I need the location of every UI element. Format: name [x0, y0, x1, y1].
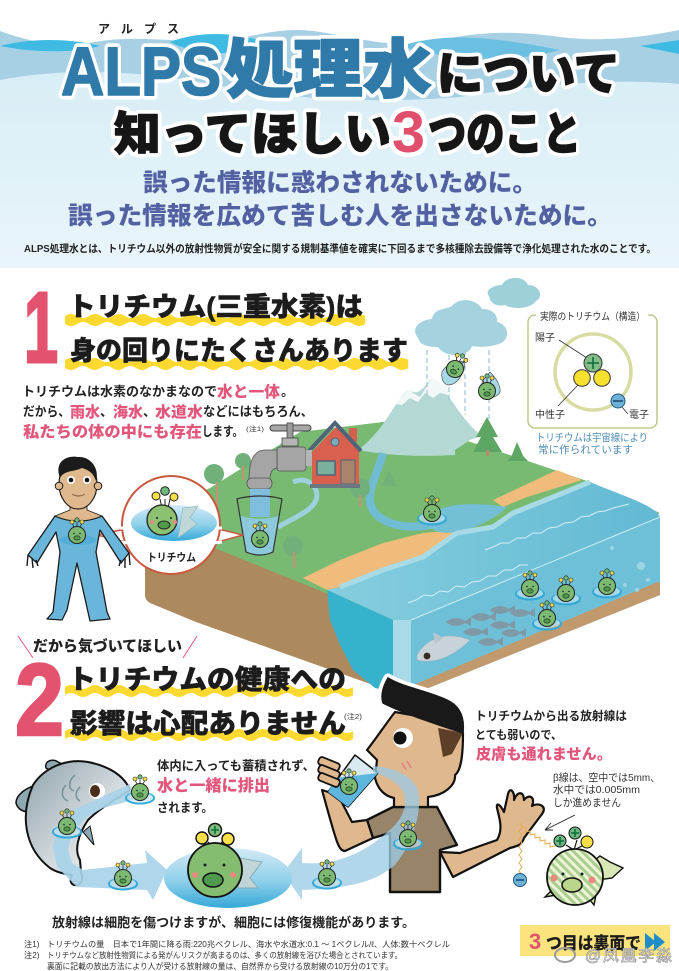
- section 1 body text: (注1): [246, 424, 264, 433]
- diorama: land and sea block: [145, 378, 660, 695]
- text: beta ray range: [553, 771, 660, 809]
- characters in the streams: [53, 775, 422, 890]
- cloud: large: [415, 300, 507, 355]
- electron: [611, 394, 625, 408]
- section 1 body text: [22, 382, 313, 441]
- section 1 body text: 、: [100, 404, 113, 419]
- section 1 body text: 、: [143, 404, 156, 419]
- section 1 body text: トリチウムは水素のなかまなので: [22, 384, 217, 399]
- title: つのこと: つのこと: [428, 108, 581, 160]
- title: について: について: [437, 48, 620, 100]
- title: ALPS: ALPS: [61, 33, 221, 110]
- callout: third point on the back: つ目は裏面で: [546, 933, 641, 953]
- title: 3: 3: [392, 100, 425, 165]
- text: not accumulated in the body: されます。: [157, 801, 213, 815]
- furigana アルプス: アルプス: [98, 22, 179, 36]
- panel title: [536, 310, 648, 320]
- sideburn: [438, 728, 463, 757]
- section 1 body text: 。: [281, 384, 294, 399]
- text: not accumulated in the body: 水と一緒に排出: [157, 776, 270, 795]
- house: [309, 423, 361, 488]
- footnotes: 裏面に記載の放出方法により人が受ける放射線の量は、自然界から受ける放射線の10万分の1です。: [47, 961, 393, 971]
- section 1 body text: などにはもちろん、: [203, 404, 313, 419]
- heading line 2: 身の回りにたくさんあります: [70, 336, 408, 366]
- footnotes: トリチウムなど放射性物質による発がんリスクが高まるのは、多くの放射線を浴びた場合とされています。: [47, 950, 402, 960]
- section 1 number: 1: [24, 272, 58, 384]
- text: radiation is very weak: とても弱いので、: [475, 728, 562, 742]
- glass corner: [393, 620, 411, 695]
- section 1 body text: 海水: [113, 403, 143, 421]
- text: beta ray range: β線は、空中では5mm、: [553, 771, 660, 784]
- text: radiation is very weak: 皮膚も通れません。: [476, 745, 612, 763]
- heading line 1: トリチウム(三重水素)は: [68, 292, 363, 322]
- title: ALPS: ALPS: [61, 33, 221, 110]
- mountains: [358, 378, 482, 456]
- title: つのこと: つのこと: [428, 108, 581, 160]
- small stream left: [278, 480, 317, 527]
- panel: actual tritium structure: 中性子: [535, 408, 565, 421]
- faucet: [247, 423, 312, 489]
- title: 処理水: 処理水: [224, 34, 432, 106]
- pond: [425, 504, 507, 533]
- section 1 body text: だから、: [23, 404, 70, 419]
- callout circle: tritium character: [120, 476, 222, 574]
- shoreline foam: [340, 482, 590, 587]
- section 1 body text: 水と一体: [217, 382, 280, 401]
- right arm and hand: [440, 790, 544, 877]
- section 1 body text: 私たちの体の中にも存在: [23, 422, 202, 441]
- central tritium character: [164, 824, 292, 908]
- repair statement: 放射線は細胞を傷つけますが、細胞には修復機能があります。: [52, 915, 415, 930]
- callout: third point on the back: [520, 925, 670, 956]
- yellow band 2: [65, 729, 353, 741]
- callout: third point on the back: 3: [529, 929, 541, 954]
- header background with waves: [0, 0, 679, 268]
- subtitle: 誤った情報を広めて苦しむ人を出さないために。: [68, 202, 612, 230]
- text: not accumulated in the body: 体内に入っても蓄積されず、: [157, 758, 315, 773]
- wave lines: [408, 504, 629, 603]
- white halo around head: [367, 678, 463, 798]
- body suit: [28, 516, 129, 621]
- panel: actual tritium structure: 実際のトリチウム（構造）: [540, 310, 645, 323]
- fish school: [446, 605, 535, 646]
- sea top: [327, 482, 660, 620]
- title line 1: [61, 33, 620, 110]
- section 2 heading: [65, 665, 362, 741]
- sea front face: [411, 517, 660, 695]
- footnotes: 注2): [24, 950, 40, 960]
- neutrons: [574, 370, 610, 386]
- sea left face: [327, 590, 393, 692]
- hair: [382, 678, 463, 733]
- text: radiation is very weak: [475, 708, 627, 763]
- section 1 body text: 水道水: [155, 403, 203, 421]
- text: not accumulated in the body: [157, 758, 315, 815]
- note: tritium made by cosmic rays: 常に作られています: [538, 443, 633, 456]
- yellow band 1: [65, 685, 353, 697]
- fish: [16, 760, 130, 885]
- title: 知ってほしい: 知ってほしい: [114, 108, 391, 160]
- yellow band 2: [65, 358, 408, 370]
- proton: [584, 354, 602, 372]
- soil side: [145, 520, 393, 692]
- cloud: small: [488, 278, 540, 308]
- beach: lower: [303, 530, 457, 590]
- note: tritium made by cosmic rays: [536, 431, 648, 456]
- section 2 lead-in: [18, 636, 197, 658]
- electron: [514, 874, 526, 886]
- water glass: [237, 489, 282, 555]
- arrow: through body to water: [283, 766, 419, 900]
- panel: actual tritium structure: 電子: [629, 409, 649, 421]
- shirt: [367, 807, 457, 892]
- title: について: について: [437, 48, 620, 100]
- callout tails: [97, 528, 243, 543]
- section 1 body text: 雨水: [70, 403, 100, 421]
- text: beta ray range: しか進めません: [553, 796, 621, 809]
- title: 知ってほしい: 知ってほしい: [114, 108, 391, 160]
- river: [370, 453, 440, 527]
- subtitle: [68, 169, 612, 230]
- head: [59, 459, 97, 509]
- label トリチウム: トリチウム: [147, 551, 196, 564]
- arrow: through fish to water: [53, 784, 167, 900]
- hands: [27, 553, 130, 568]
- panel: actual tritium structure: [528, 310, 657, 428]
- watermark: @凤凰李淼: [585, 947, 672, 965]
- subtitle: 誤った情報に惑わされないために。: [143, 169, 537, 197]
- text: radiation is very weak: トリチウムから出る放射線は: [475, 708, 627, 723]
- neck and face: [367, 712, 463, 807]
- section 1 body text: します。: [202, 424, 243, 439]
- rain: [427, 350, 489, 425]
- raindrop characters: [442, 350, 500, 400]
- neck and chest: [55, 505, 102, 521]
- land surface: [145, 420, 660, 620]
- seabed strip: [383, 582, 660, 695]
- title: 処理水: 処理水: [224, 34, 432, 106]
- big fish: [417, 632, 470, 661]
- arrow to hand: [545, 815, 575, 830]
- section 1 heading: [65, 292, 408, 370]
- note: tritium made by cosmic rays: トリチウムは宇宙線により: [536, 431, 648, 444]
- footnotes: トリチウムの量 日本で1年間に降る雨:220兆ベクレル、海水や水道水:0.1 〜 1ベクレル/ℓ、人体:数十ベクレル: [47, 939, 450, 949]
- footnote mark: (注2): [344, 712, 362, 721]
- title: 3: 3: [392, 100, 425, 165]
- eye: [393, 728, 413, 748]
- footnotes: [24, 939, 450, 971]
- section 2 lead-in: だから気づいてほしい: [33, 637, 182, 655]
- heading line 1: トリチウムの健康への: [68, 665, 346, 695]
- bubbles: [610, 546, 650, 592]
- left arm: [322, 790, 373, 851]
- footnotes: 注1): [24, 939, 40, 949]
- fist: [317, 756, 341, 788]
- damaged tritium character: [545, 827, 623, 905]
- heading line 2: 影響は心配ありません: [70, 709, 346, 739]
- title line 2: [114, 100, 581, 165]
- text: beta ray range: 水中では0.005mm: [553, 783, 640, 796]
- man drinking water: [317, 678, 544, 892]
- hair: [58, 457, 97, 481]
- radiation squiggles: [519, 823, 555, 879]
- panel: actual tritium structure: 陽子: [535, 332, 555, 344]
- trees: [204, 417, 528, 568]
- yellow band 1: [65, 314, 365, 326]
- person with tritium in body: [27, 457, 130, 621]
- cup: [328, 755, 378, 807]
- beach: upper: [493, 470, 582, 507]
- double arrow: [645, 933, 665, 951]
- tritium characters in water: [418, 496, 621, 630]
- section 2 number: 2: [15, 643, 64, 757]
